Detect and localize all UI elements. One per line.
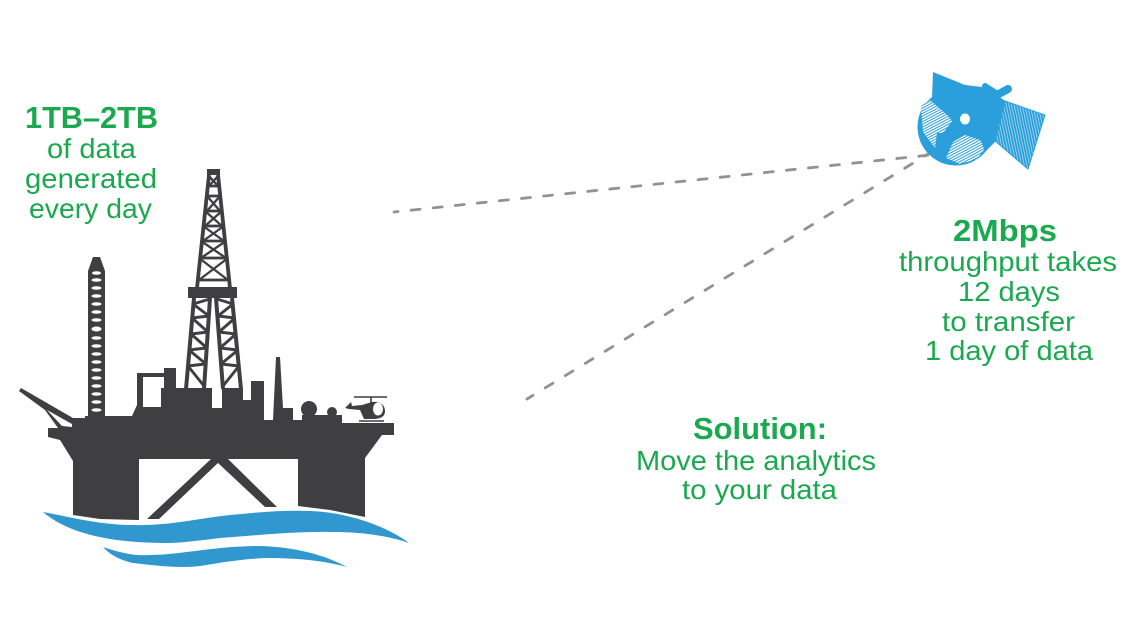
text: throughput: 12 days <box>958 276 1060 307</box>
boom <box>19 388 73 429</box>
lens <box>960 114 970 124</box>
tanks <box>301 401 337 417</box>
rig hull and deck <box>48 357 394 520</box>
text: data generated: of data <box>47 133 136 164</box>
white opening in superstructure <box>143 377 164 407</box>
icon: oil rig <box>19 169 394 520</box>
text: solution: Move the analytics <box>636 445 876 476</box>
text: solution <box>636 411 876 505</box>
dashed link: rig to satellite, upper <box>394 155 930 212</box>
dashed link: rig to satellite, lower <box>527 154 928 399</box>
lower wave <box>103 546 347 567</box>
text: solution: to your data <box>682 474 837 505</box>
upper wave <box>43 511 409 543</box>
derrick <box>186 169 241 389</box>
text: throughput: 1 day of data <box>925 335 1093 366</box>
crane tower <box>88 257 105 416</box>
solar panel <box>995 101 1045 169</box>
text: throughput <box>899 213 1117 366</box>
underside braces <box>147 459 277 519</box>
text: data generated <box>25 100 158 224</box>
text: throughput: to transfer <box>942 306 1075 337</box>
dish hatched region lower <box>946 135 986 164</box>
text: data generated: every day <box>29 193 152 224</box>
antenna stub <box>997 89 1008 95</box>
icon: satellite <box>918 72 1045 169</box>
dish <box>918 88 994 166</box>
boom gap <box>47 410 72 427</box>
dish hatched region upper <box>921 100 953 148</box>
icon: waves <box>43 511 409 567</box>
text: data generated: 1TB–2TB <box>25 100 158 135</box>
helicopter <box>345 397 387 421</box>
text: throughput: 2Mbps <box>953 213 1057 248</box>
antenna <box>985 86 996 93</box>
satellite body <box>932 72 1007 152</box>
text: throughput: throughput takes <box>899 246 1117 277</box>
text: solution: Solution: <box>693 411 827 446</box>
text: data generated: generated <box>25 163 157 194</box>
